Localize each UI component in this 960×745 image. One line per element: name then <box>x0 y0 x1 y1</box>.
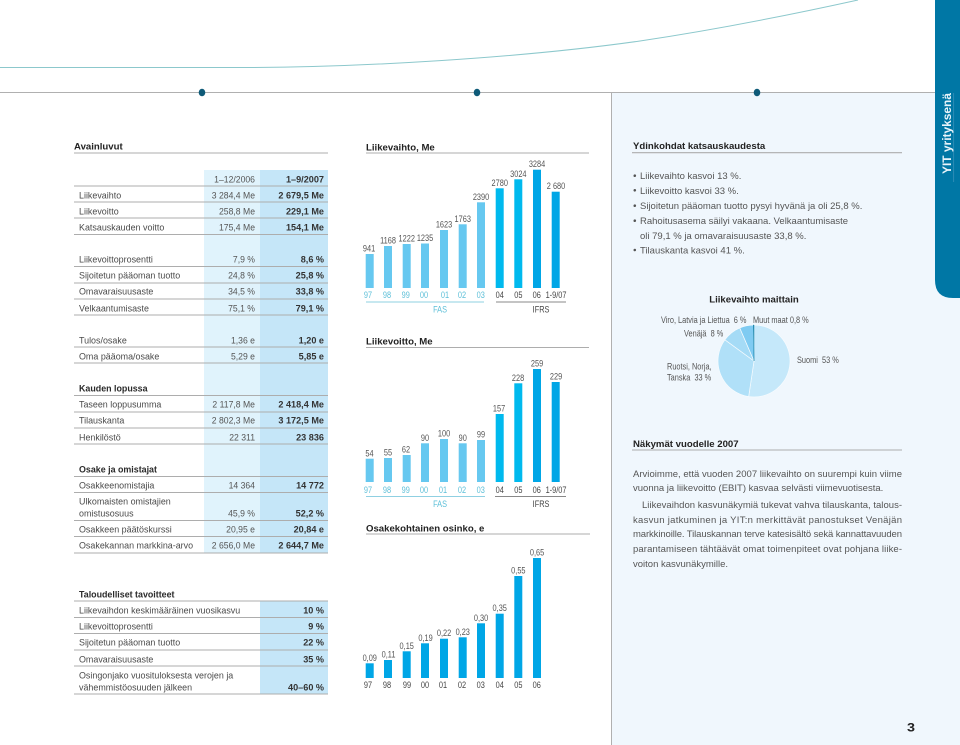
table: financial targets: 22 % <box>303 637 325 648</box>
heading: Liikevaihto, Me: Liikevaihto, Me <box>366 142 435 154</box>
bullet list: highlights: oli 79,1 % ja omavaraisuusaste 33,8 %. <box>640 231 806 242</box>
bar chart: Liikevoitto: 99 <box>402 485 410 495</box>
bar chart: Liikevaihto: 1763 <box>455 214 471 224</box>
bar chart: Liikevaihto: FAS <box>433 305 447 315</box>
bar chart: Osakekohtainen osinko: 0,55 <box>511 566 526 576</box>
bar chart: Liikevoitto: 98 <box>383 485 392 495</box>
bar chart: Liikevaihto: 3284 <box>529 160 546 169</box>
bar chart: Liikevoitto: FAS <box>433 499 447 509</box>
table: key figures: 5,85 e <box>299 351 324 362</box>
bar chart: Liikevaihto: 2390 <box>473 192 490 202</box>
bar chart: Osakekohtainen osinko: 0,23 <box>456 627 470 637</box>
table: financial targets: vähemmistöosuuden jälkeen <box>79 682 192 693</box>
heading: Ydinkohdat katsauskaudesta: Ydinkohdat katsauskaudesta <box>633 141 766 152</box>
table: key figures: 5,29 e <box>231 351 255 362</box>
bullet list: highlights: Sijoitetun pääoman tuotto pysyi hyvänä ja oli 25,8 %. <box>640 201 862 212</box>
table: key figures: 33,8 % <box>296 286 325 297</box>
bar chart: Liikevoitto: 62 <box>402 445 411 455</box>
bar chart: Liikevaihto: 02 <box>458 290 467 300</box>
heading: Liikevaihto maittain: Liikevaihto maittain <box>709 294 799 306</box>
text block: outlook: markkinoille. Tilauskannan terve katesisältö sekä kannattavuuden <box>633 529 902 540</box>
bar chart: Liikevoitto: 00 <box>420 485 429 495</box>
bar chart: Osakekohtainen osinko: 97 <box>364 680 373 690</box>
table: financial targets: 35 % <box>303 654 325 665</box>
table: key figures: 2 656,0 Me <box>212 540 255 551</box>
table: key figures: 25,8 % <box>296 270 325 281</box>
decorative curve line <box>0 0 858 68</box>
table: key figures: 1,36 e <box>231 335 255 346</box>
pie chart: Liikevaihto maittain: Viro, Latvia ja Liettua 6 % <box>661 315 747 325</box>
bar chart: Osakekohtainen osinko: 03 <box>477 680 485 690</box>
bullet list: highlights: Tilauskanta kasvoi 41 %. <box>640 246 745 256</box>
bullet list: highlights <box>634 171 862 256</box>
bar chart: Liikevoitto: 06 <box>533 485 541 495</box>
bar chart: Liikevoitto <box>364 359 567 509</box>
table: key figures: 52,2 % <box>296 508 325 519</box>
bar chart: Osakekohtainen osinko <box>363 548 545 690</box>
table: key figures: 20,84 e <box>294 524 324 535</box>
table: financial targets: 40–60 % <box>288 682 325 693</box>
heading: Näkymät vuodelle 2007: Näkymät vuodelle 2007 <box>633 439 739 450</box>
table: key figures: 258,8 Me <box>219 206 255 217</box>
table: key figures: 3 284,4 Me <box>212 190 255 201</box>
bar chart: Liikevoitto: 157 <box>493 404 506 414</box>
table: key figures: Tilauskanta <box>79 415 125 426</box>
bar chart: Osakekohtainen osinko: 99 <box>403 680 412 690</box>
table: financial targets <box>74 590 328 694</box>
heading: Liikevoitto, Me: Liikevoitto, Me <box>366 336 433 348</box>
table: key figures: Ulkomaisten omistajien <box>79 496 171 507</box>
table: key figures: Liikevoitto <box>79 206 119 217</box>
bar chart: Liikevoitto: 259 <box>531 359 544 369</box>
table: key figures: Osakkeen päätöskurssi <box>79 524 172 535</box>
bar chart: Liikevaihto: IFRS <box>533 305 550 315</box>
bar chart: Osakekohtainen osinko: 0,65 <box>530 548 545 558</box>
bar chart: Liikevoitto: 99 <box>477 430 486 440</box>
bar chart: Liikevaihto: 2780 <box>492 178 508 188</box>
bullet list: highlights: Liikevoitto kasvoi 33 %. <box>640 186 739 197</box>
bar chart: Osakekohtainen osinko: 0,30 <box>474 613 489 623</box>
table: key figures: 1–9/2007 <box>286 174 324 185</box>
table: financial targets: Taloudelliset tavoitteet <box>79 590 175 600</box>
table: financial targets: 9 % <box>308 621 325 632</box>
bar chart: Liikevoitto: 90 <box>421 433 430 443</box>
bar chart: Liikevoitto: 55 <box>384 448 393 458</box>
bar chart: Liikevaihto <box>363 160 567 315</box>
bar chart: Liikevaihto: 04 <box>496 290 504 300</box>
text block: outlook: parantamiseen tähtäävät omat toimenpiteet ovat pohjana liike- <box>633 544 902 555</box>
bar chart: Liikevaihto: 00 <box>420 290 429 300</box>
bar chart: Liikevaihto: 03 <box>477 290 485 300</box>
table: financial targets: Liikevoittoprosentti <box>79 621 153 632</box>
pie chart: Liikevaihto maittain: Suomi 53 % <box>797 355 839 365</box>
bar chart: Liikevoitto: 100 <box>438 429 451 439</box>
table: key figures: 8,6 % <box>301 254 325 265</box>
table: key figures: Tulos/osake <box>79 335 127 346</box>
table: key figures: Liikevoittoprosentti <box>79 254 153 265</box>
bar chart: Liikevaihto: 1168 <box>380 236 396 246</box>
table: key figures: Sijoitetun pääoman tuotto <box>79 270 180 281</box>
text block: outlook: Arvioimme, että vuoden 2007 liikevaihto on suurempi kuin viime <box>633 469 902 480</box>
bullet list: highlights: Rahoitusasema säilyi vakaana. Velkaantumisaste <box>640 216 848 227</box>
table: key figures: 3 172,5 Me <box>278 415 324 426</box>
bar chart: Osakekohtainen osinko: 0,35 <box>493 604 507 613</box>
table: key figures: 154,1 Me <box>286 222 324 233</box>
bar chart: Liikevaihto: 1235 <box>417 233 434 243</box>
bar chart: Liikevaihto: 06 <box>533 290 541 300</box>
bar chart: Liikevoitto: 03 <box>477 485 485 495</box>
bar chart: Liikevoitto: 228 <box>512 373 525 383</box>
table: financial targets: Omavaraisuusaste <box>79 654 153 665</box>
side tab: YIT yrityksenä <box>935 0 960 298</box>
bar chart: Liikevaihto: 941 <box>363 244 376 254</box>
table: key figures: Osakkeenomistajia <box>79 480 155 491</box>
heading: Osakekohtainen osinko, e: Osakekohtainen osinko, e <box>366 524 484 534</box>
bar chart: Liikevaihto: 97 <box>364 290 373 300</box>
table: key figures: 1,20 e <box>299 335 324 346</box>
table: key figures: Henkilöstö <box>79 432 121 443</box>
table: key figures: Omavaraisuusaste <box>79 286 153 297</box>
bar chart: Osakekohtainen osinko: 0,11 <box>382 650 396 660</box>
table: key figures: omistusosuus <box>79 508 134 519</box>
table: key figures: 175,4 Me <box>219 222 255 233</box>
heading: Avainluvut: Avainluvut <box>74 142 123 152</box>
table: financial targets: Osingonjako vuosituloksesta verojen ja <box>79 670 234 681</box>
pie chart: Liikevaihto maittain: Muut maat 0,8 % <box>753 315 809 325</box>
table: key figures: Liikevaihto <box>79 190 121 201</box>
table: key figures: Katsauskauden voitto <box>79 222 164 233</box>
bar chart: Liikevaihto: 3024 <box>510 169 527 179</box>
table: key figures: 20,95 e <box>226 524 255 535</box>
text block: outlook: kasvun jatkuminen ja YIT:n merkittävät panostukset Venäjän <box>633 515 902 526</box>
bar chart: Osakekohtainen osinko: 01 <box>439 680 448 690</box>
table: key figures: 14 772 <box>296 480 324 491</box>
bar chart: Liikevoitto: 05 <box>514 485 523 495</box>
table: key figures: 1–12/2006 <box>214 174 255 185</box>
bar chart: Liikevaihto: 01 <box>441 290 450 300</box>
table: key figures: 2 679,5 Me <box>278 190 324 201</box>
bar chart: Liikevaihto: 98 <box>383 290 392 300</box>
table: key figures: 229,1 Me <box>286 206 324 217</box>
table: key figures: 45,9 % <box>228 508 255 519</box>
panel: right background <box>612 93 960 745</box>
pie chart: Liikevaihto maittain: Venäjä 8 % <box>684 329 724 339</box>
table: key figures: Oma pääoma/osake <box>79 351 159 362</box>
bar chart: Osakekohtainen osinko: 98 <box>383 680 392 690</box>
bar chart: Osakekohtainen osinko: 0,22 <box>437 629 452 638</box>
bar chart: Osakekohtainen osinko: 0,19 <box>418 633 433 643</box>
bar chart: Osakekohtainen osinko: 00 <box>421 680 430 690</box>
text block: outlook: voiton kasvunäkymille. <box>633 559 728 570</box>
bar chart: Osakekohtainen osinko: 06 <box>533 680 541 690</box>
table: key figures: 24,8 % <box>228 270 255 281</box>
bar chart: Liikevoitto: 1-9/07 <box>546 485 567 495</box>
table: key figures: Kauden lopussa <box>79 384 148 394</box>
pie chart: Liikevaihto maittain: Ruotsi, Norja, <box>667 362 712 372</box>
table: key figures: 2 117,8 Me <box>212 399 255 410</box>
table: key figures: Taseen loppusumma <box>79 399 162 410</box>
bar chart: Liikevaihto: 99 <box>402 290 410 300</box>
table: key figures: 7,9 % <box>233 254 255 265</box>
top rule with dots <box>0 89 935 96</box>
bar chart: Liikevaihto: 1222 <box>399 234 415 244</box>
bar chart: Liikevoitto: IFRS <box>533 499 550 509</box>
table: financial targets: 10 % <box>303 605 325 616</box>
table: financial targets: Liikevaihdon keskimääräinen vuosikasvu <box>79 605 240 616</box>
table: key figures: 14 364 <box>229 480 255 491</box>
bar chart: Liikevoitto: 54 <box>365 449 374 458</box>
bar chart: Osakekohtainen osinko: 05 <box>514 680 523 690</box>
bullet list: highlights: Liikevaihto kasvoi 13 %. <box>640 171 741 182</box>
table: financial targets: Sijoitetun pääoman tuotto <box>79 637 180 648</box>
table: key figures: 75,1 % <box>228 303 255 314</box>
bar chart: Liikevaihto: 2 680 <box>547 182 566 191</box>
table: key figures: Velkaantumisaste <box>79 303 149 314</box>
table: key figures: Osakekannan markkina-arvo <box>79 540 193 551</box>
text block: outlook: vuonna ja liikevoitto (EBIT) kasvaa selvästi viimevuotisesta. <box>633 483 883 494</box>
pie chart: Liikevaihto maittain: Tanska 33 % <box>667 373 712 383</box>
side tab: YIT yrityksenä: YIT yrityksenä <box>942 92 954 174</box>
page number: 3 <box>907 720 915 734</box>
table: key figures: Osake ja omistajat <box>79 464 157 474</box>
table: key figures: 22 311 <box>229 432 255 443</box>
bar chart: Osakekohtainen osinko: 04 <box>496 680 504 690</box>
bar chart: Osakekohtainen osinko: 0,09 <box>363 653 377 663</box>
bar chart: Liikevaihto: 05 <box>514 290 523 300</box>
table: key figures: 34,5 % <box>228 286 255 297</box>
table: key figures: 2 644,7 Me <box>278 540 324 551</box>
text block: outlook <box>633 469 902 570</box>
text block: outlook: Liikevaihdon kasvunäkymiä tukevat vahva tilauskanta, talous- <box>642 500 902 511</box>
bar chart: Liikevoitto: 229 <box>550 372 563 382</box>
bar chart: Liikevoitto: 04 <box>496 485 504 495</box>
table: key figures: 2 418,4 Me <box>278 399 324 410</box>
bar chart: Liikevaihto: 1-9/07 <box>546 290 567 300</box>
bar chart: Liikevoitto: 97 <box>364 485 373 495</box>
bar chart: Liikevaihto: 1623 <box>436 220 453 230</box>
bar chart: Liikevoitto: 90 <box>459 433 467 443</box>
bar chart: Osakekohtainen osinko: 02 <box>458 680 467 690</box>
table: key figures <box>74 170 328 553</box>
bar chart: Osakekohtainen osinko: 0,15 <box>400 641 414 651</box>
bar chart: Liikevoitto: 01 <box>439 485 448 495</box>
table: key figures: 79,1 % <box>296 303 325 314</box>
bar chart: Liikevoitto: 02 <box>458 485 467 495</box>
table: key figures: 23 836 <box>296 432 324 443</box>
table: key figures: 2 802,3 Me <box>212 415 255 426</box>
pie chart: Liikevaihto maittain <box>661 315 839 397</box>
